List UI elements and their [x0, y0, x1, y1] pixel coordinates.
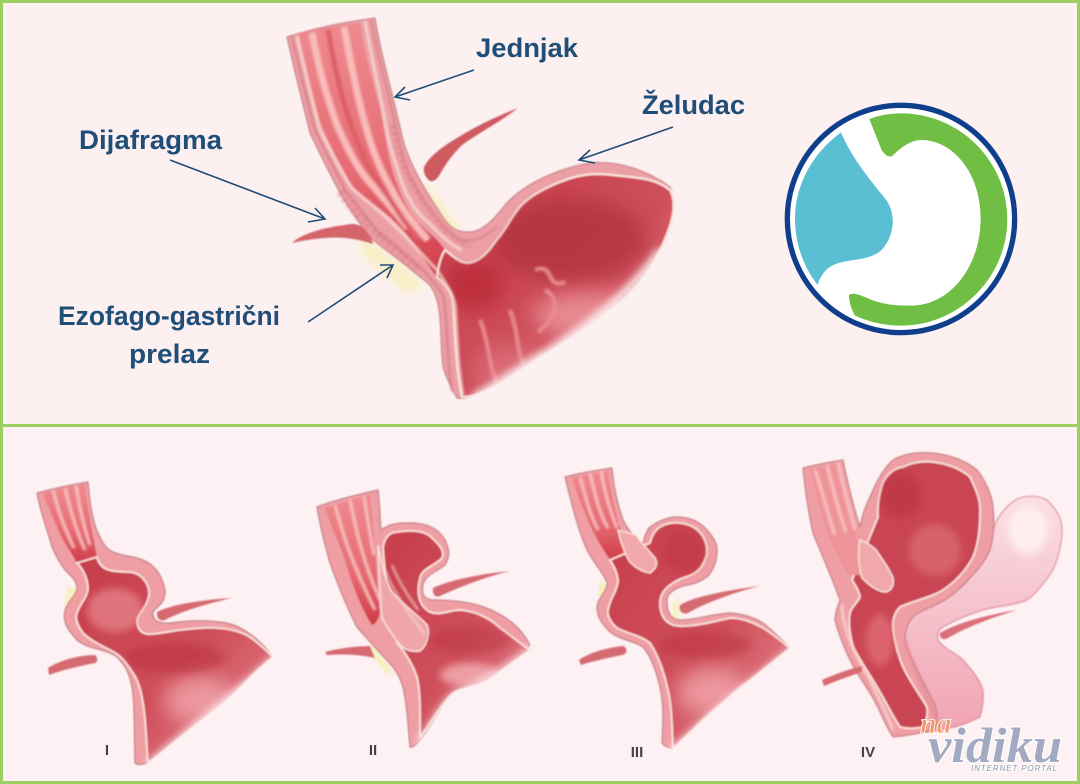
fuzzy lower edge of stomach — [474, 250, 662, 398]
diaphragm IV upper — [940, 610, 1017, 639]
herniated pale organ — [895, 496, 1062, 732]
illustration: type IV — [803, 453, 1062, 737]
diaphragm I lower — [48, 655, 97, 675]
shading type III — [659, 532, 751, 716]
diaphragm III lower — [579, 646, 626, 665]
shading type I — [87, 588, 236, 724]
watermark: na vidiku: vidiku — [928, 717, 1062, 773]
label: Dijafragma: Dijafragma — [79, 125, 223, 155]
diaphragm upper — [424, 108, 518, 181]
label: III: III — [631, 744, 643, 761]
shading type IV — [866, 473, 961, 666]
arrow: Ezofago-gastrični prelaz — [308, 265, 393, 322]
arrow: Dijafragma — [170, 160, 325, 222]
shading type II — [430, 626, 510, 687]
stomach folds — [445, 198, 648, 396]
illustration: type II — [317, 490, 532, 747]
arrow: Želudac — [579, 127, 673, 163]
label: II: II — [369, 742, 377, 759]
panel: normal anatomy — [2, 2, 1078, 426]
esophagus muscle stripes — [292, 20, 497, 395]
arrow: Jednjak — [395, 70, 474, 100]
label: IV: IV — [861, 744, 875, 761]
icon: stomach logo — [787, 105, 1015, 333]
label: Želudac: Želudac — [642, 89, 745, 120]
diaphragm II lower — [325, 646, 375, 658]
illustration: type I — [37, 482, 275, 765]
watermark: na vidiku: na — [920, 707, 952, 740]
diaphragm III upper — [679, 586, 760, 613]
label: I: I — [105, 742, 109, 759]
diaphragm II upper — [433, 571, 510, 597]
panel: hernia types — [2, 426, 1078, 782]
diaphragm lower — [292, 224, 373, 244]
diaphragm I upper — [157, 598, 232, 621]
label: Ezofago-gastrični prelaz — [58, 301, 280, 369]
diaphragm IV lower — [822, 666, 862, 686]
label: Ezofago-gastrični prelaz: Ezofago-gastrični — [58, 301, 280, 331]
watermark: na vidiku: INTERNET PORTAL — [971, 764, 1057, 773]
label: Ezofago-gastrični prelaz: prelaz — [129, 339, 210, 369]
illustration: type III — [565, 468, 792, 752]
label: Jednjak: Jednjak — [476, 33, 579, 63]
illustration: esophagus and stomach — [287, 18, 674, 398]
